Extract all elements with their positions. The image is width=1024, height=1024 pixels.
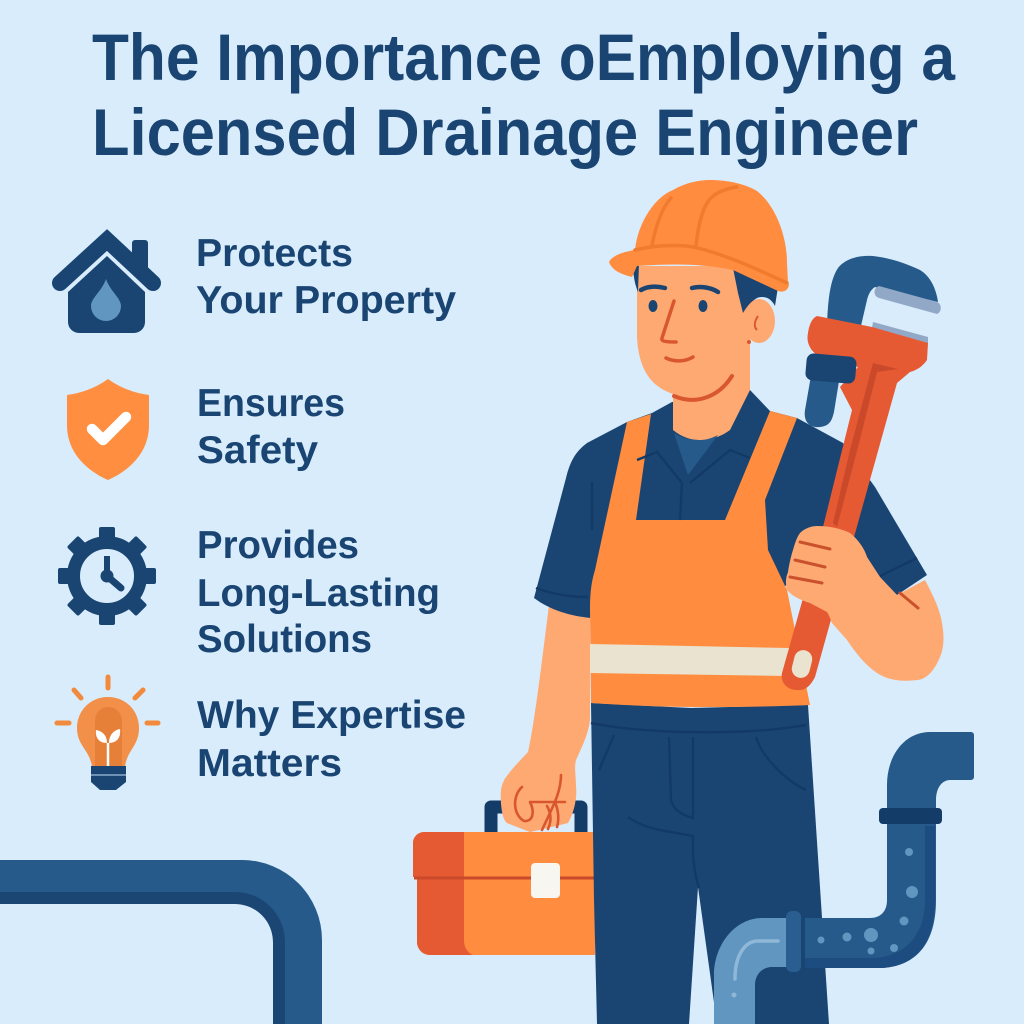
t-shirt neckline — [674, 433, 718, 475]
icon: gear with clock — [58, 527, 156, 625]
text: why expertise matters: Matters — [197, 742, 342, 785]
bubbles — [818, 848, 918, 954]
panel: benefits list — [57, 232, 466, 790]
light blue elbow — [714, 918, 786, 1024]
text: ensures safety: Safety — [197, 429, 318, 472]
trousers — [591, 703, 829, 1024]
text: long-lasting solutions: Long-Lasting — [197, 572, 440, 615]
hair — [633, 264, 778, 313]
pipe wrench — [782, 256, 941, 690]
icon: safety shield — [67, 379, 149, 480]
title — [92, 20, 956, 169]
hard hat — [609, 180, 789, 292]
worker illustration — [413, 180, 943, 1024]
text: protects your property: Your Property — [196, 279, 456, 322]
gripping hand and right arm — [786, 526, 943, 681]
safety vest — [590, 411, 810, 707]
reflective stripe — [590, 644, 790, 676]
hand gripping toolbox handle — [501, 773, 576, 832]
text: why expertise matters — [197, 694, 466, 785]
face details — [641, 287, 732, 400]
shirt — [534, 390, 927, 703]
title: Licensed Drainage Engineer — [92, 95, 918, 169]
pipe clamp — [879, 808, 942, 824]
text: why expertise matters: Why Expertise — [197, 694, 466, 737]
text: long-lasting solutions: Solutions — [197, 618, 372, 661]
title: The Importance oEmploying a — [92, 20, 956, 94]
head and neck — [633, 264, 778, 475]
text: protects your property: Protects — [196, 232, 353, 275]
toolbox — [413, 807, 595, 955]
wrench upper jaw — [827, 256, 938, 330]
pipe: bottom left — [0, 860, 322, 1024]
upper elbow — [805, 732, 974, 968]
text: long-lasting solutions: Provides — [197, 524, 359, 567]
pipe: right side with bubbles — [714, 732, 974, 1024]
icon: light bulb with sprout — [57, 677, 158, 790]
icon: house with water drop — [60, 240, 153, 333]
text: long-lasting solutions — [197, 524, 440, 661]
text: ensures safety — [197, 382, 345, 472]
pipe shading — [805, 826, 935, 968]
collar lines — [637, 450, 750, 520]
text: protects your property — [196, 232, 456, 322]
left arm — [501, 605, 590, 832]
text: ensures safety: Ensures — [197, 382, 345, 425]
ear — [743, 299, 775, 343]
wrench lower jaw — [805, 370, 840, 427]
wrench handle end hole — [790, 648, 814, 680]
wrench head and handle — [782, 316, 928, 690]
pipe flange — [786, 911, 801, 972]
